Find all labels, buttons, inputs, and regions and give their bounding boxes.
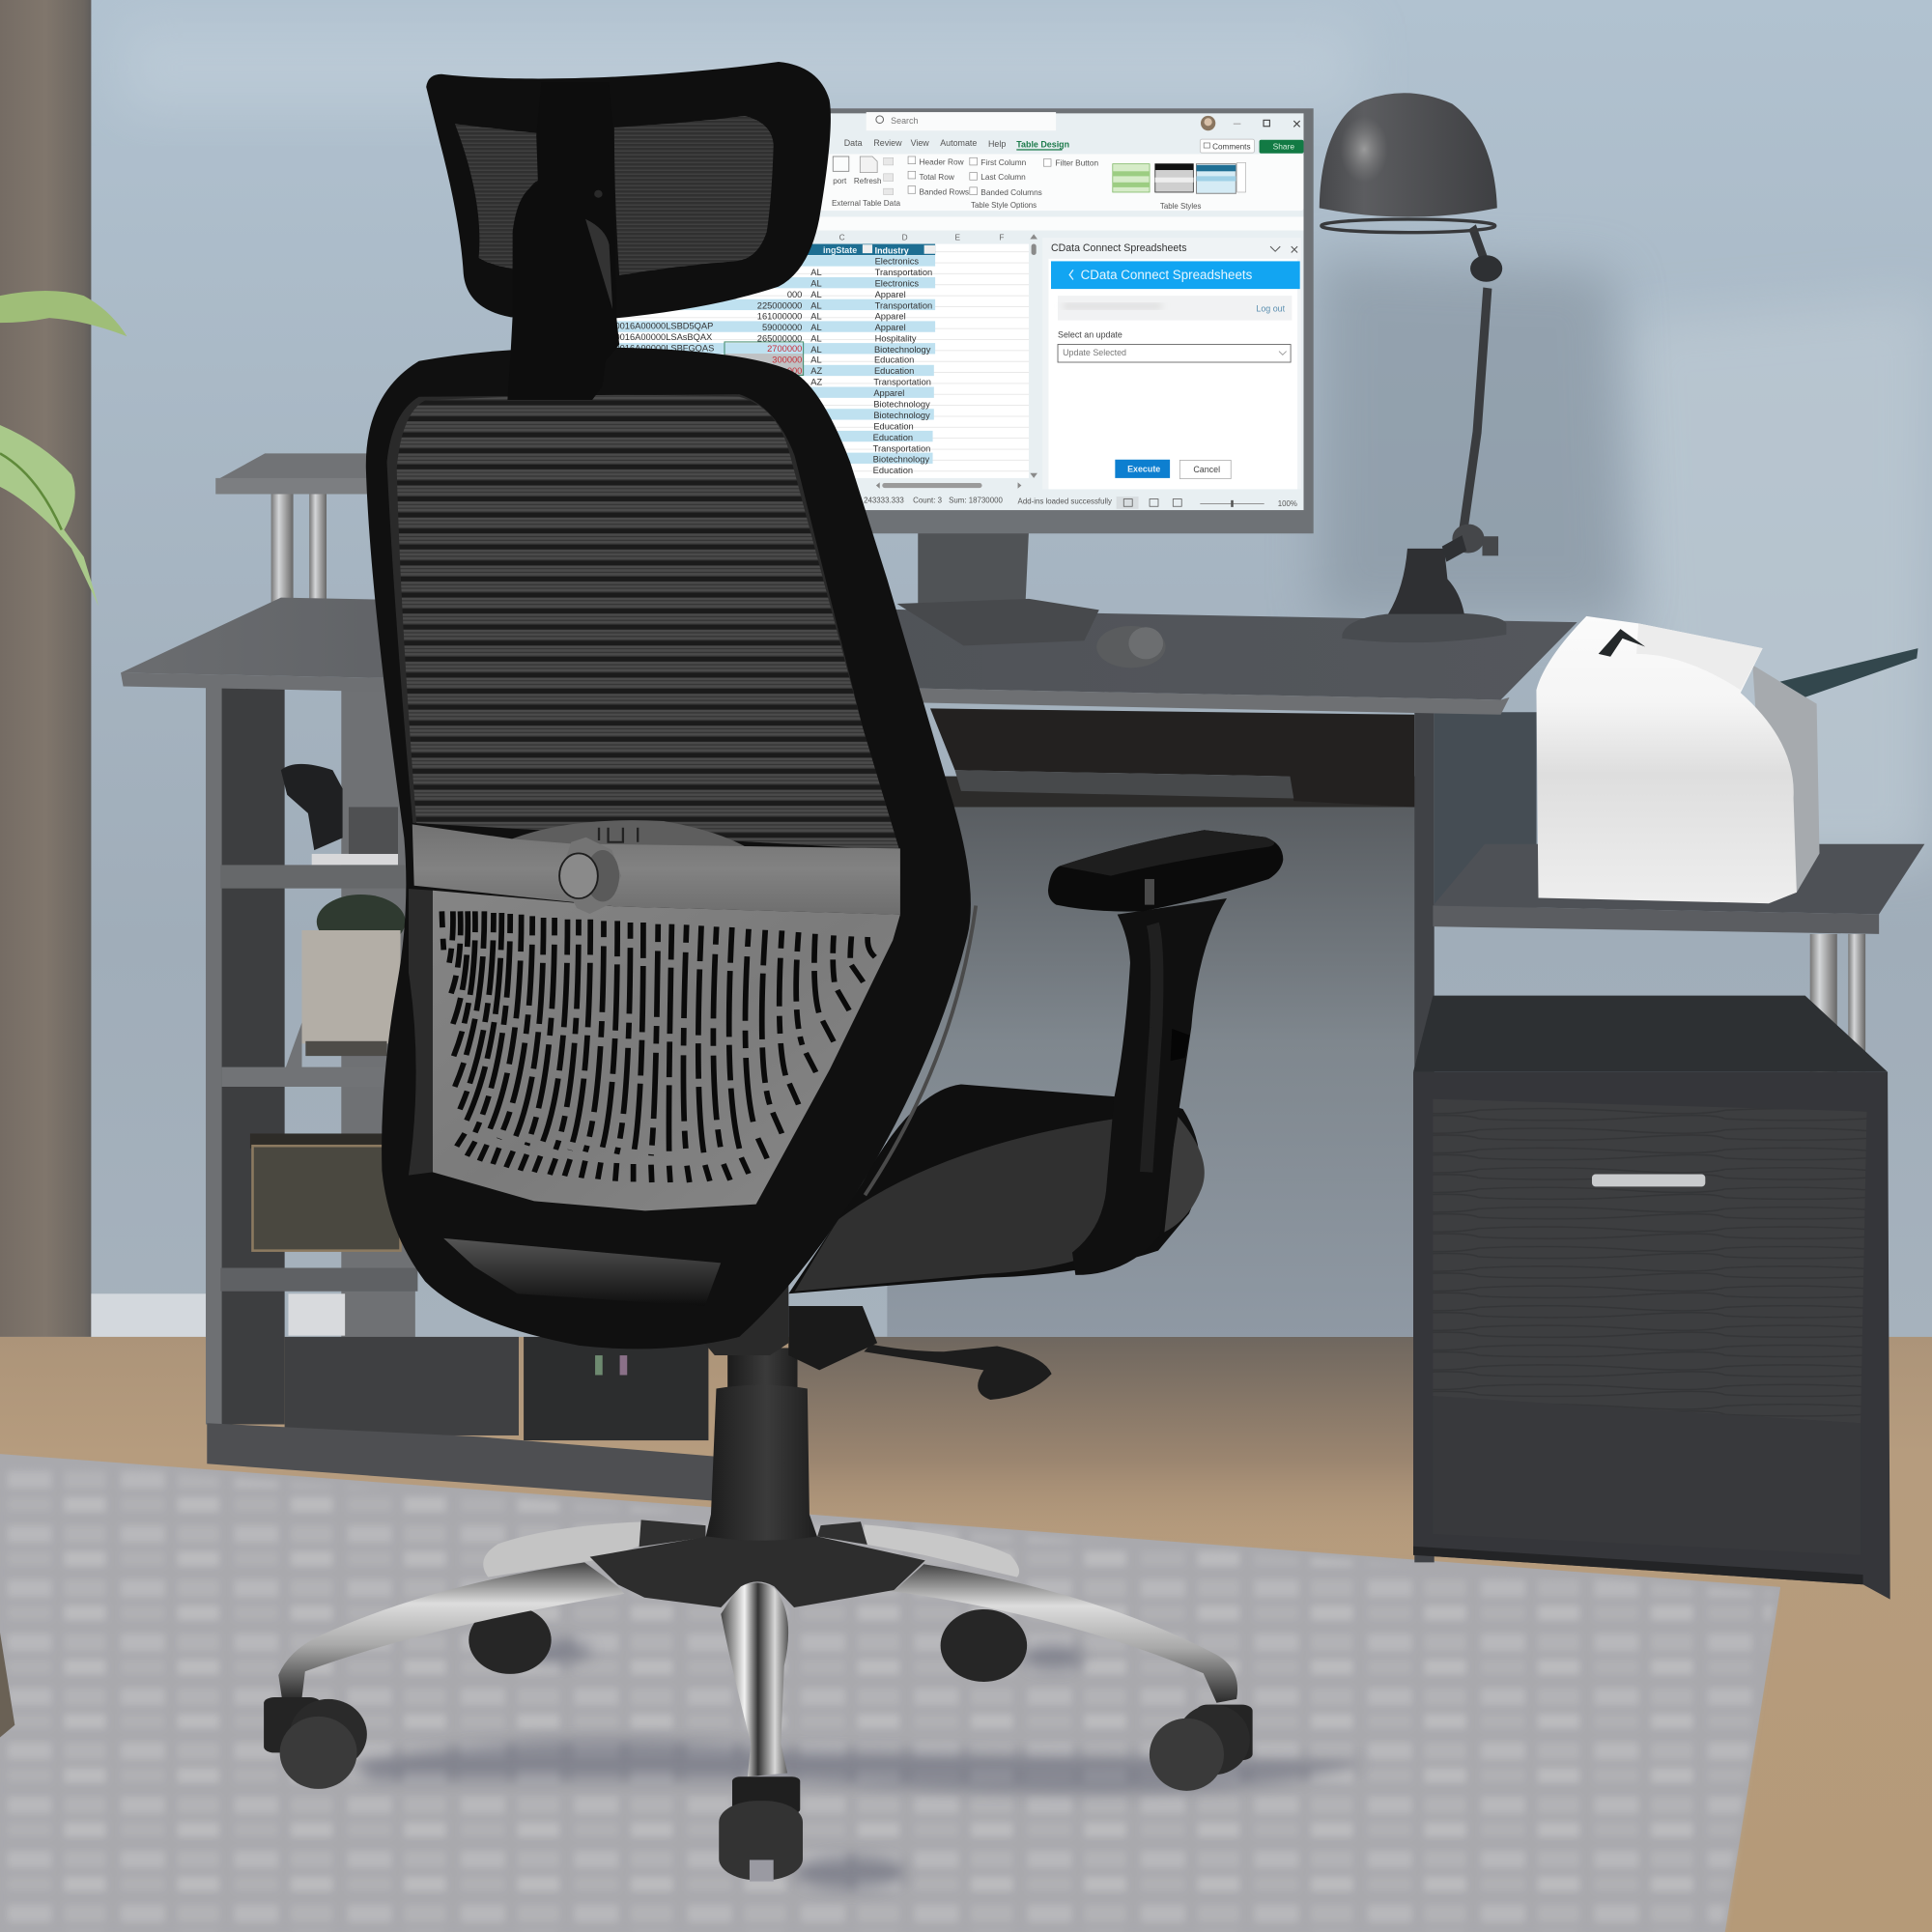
keyboard tray xyxy=(930,708,1414,807)
add-in pane: CData Connect Spreadsheets xyxy=(1051,242,1187,254)
revenue column: 000 xyxy=(787,290,802,299)
cabinet xyxy=(1413,996,1890,1600)
table style options: Table Style Options xyxy=(971,201,1037,210)
printer top shading xyxy=(1636,623,1763,690)
revenue column: 161000000 xyxy=(757,311,802,321)
lumbar knob xyxy=(559,838,621,914)
revenue column xyxy=(757,290,802,376)
horizontal scrollbar xyxy=(876,482,1021,489)
desk: right side xyxy=(887,708,1924,1600)
shelf three xyxy=(220,1267,417,1292)
headrest and neck xyxy=(426,62,831,400)
window controls xyxy=(1234,120,1300,127)
select label: Select an update xyxy=(1058,329,1122,339)
gas lift xyxy=(705,1348,817,1544)
computer tower xyxy=(524,1337,708,1440)
table header: ingState xyxy=(823,245,857,255)
table style options: Banded Columns xyxy=(980,187,1042,197)
phone on shelf xyxy=(281,764,343,850)
column letters: C xyxy=(839,233,845,242)
wall xyxy=(0,0,1932,1343)
table style options: Filter Button xyxy=(1055,158,1099,168)
outer post xyxy=(206,685,222,1424)
industry column: Education xyxy=(873,433,913,442)
back mesh xyxy=(387,394,899,850)
calculator xyxy=(312,854,398,865)
industry column: Apparel xyxy=(875,311,906,321)
column letters xyxy=(839,233,1005,242)
ribbon tabs: Table Design xyxy=(1016,139,1069,149)
seat xyxy=(788,1084,1205,1293)
office chair xyxy=(264,62,1283,1882)
wall under desk xyxy=(887,801,1417,1337)
column letters: D xyxy=(902,233,908,242)
left front spoke xyxy=(278,1562,624,1699)
status bar: Sum: 18730000 xyxy=(949,496,1003,504)
industry column: Biotechnology xyxy=(873,400,930,410)
account ids xyxy=(614,322,714,354)
wood floor xyxy=(0,1337,1932,1932)
table style options: Last Column xyxy=(980,172,1026,182)
state column xyxy=(810,268,822,387)
mouse xyxy=(1096,626,1166,668)
desk: left shelving unit xyxy=(206,685,715,1501)
upper shelf with steel legs xyxy=(215,453,518,616)
cancel button xyxy=(1179,460,1231,479)
lamp base xyxy=(1342,549,1506,642)
monitor xyxy=(579,108,1314,645)
monitor stand xyxy=(897,529,1099,645)
plate slots xyxy=(441,911,875,1182)
formula bar xyxy=(813,216,1303,231)
search box: Search xyxy=(891,116,918,126)
ribbon tabs: Review xyxy=(873,138,902,148)
industry column: Transportation xyxy=(875,301,932,311)
table style options xyxy=(908,156,1099,210)
account row xyxy=(1058,296,1292,321)
left plate shadow xyxy=(409,889,433,1176)
industry column: Apparel xyxy=(875,323,906,332)
pane header xyxy=(1051,261,1300,289)
dark inner panel xyxy=(220,685,285,1424)
lumbar support xyxy=(409,820,900,1210)
industry column: Apparel xyxy=(873,388,904,398)
vertical scrollbar xyxy=(1030,234,1037,478)
bottom left object xyxy=(0,1633,14,1737)
bezel xyxy=(579,108,1314,533)
lamp arm xyxy=(1444,227,1502,555)
status bar: 243333.333 xyxy=(864,496,904,504)
right front spoke xyxy=(884,1564,1237,1703)
state column: AL xyxy=(810,323,822,332)
headrest frame xyxy=(426,62,831,319)
back frame xyxy=(366,348,971,1349)
state column: AL xyxy=(810,279,822,289)
comments button: Comments xyxy=(1212,142,1251,151)
share button xyxy=(1260,140,1303,154)
industry column xyxy=(873,257,932,475)
state column: AL xyxy=(810,355,822,365)
account ids: 0016A00000LSAsBQAX xyxy=(614,332,712,342)
state column: AZ xyxy=(810,378,822,387)
state column: AL xyxy=(810,333,822,343)
ribbon external table data group xyxy=(832,156,900,208)
table style swatches xyxy=(1113,162,1246,211)
ribbon tabs: Automate xyxy=(940,138,977,148)
industry column: Transportation xyxy=(875,268,932,277)
account ids: 0016A00000LSBD5QAP xyxy=(614,322,713,331)
rug xyxy=(0,1454,1780,1932)
industry column: Education xyxy=(873,466,913,475)
under desk back xyxy=(887,777,1430,807)
execute button: Execute xyxy=(1127,465,1160,474)
paper tray xyxy=(1769,648,1918,707)
state column: AZ xyxy=(810,366,822,376)
revenue column: 000 xyxy=(787,366,802,376)
status bar: 100% xyxy=(1278,499,1297,508)
industry column: Biotechnology xyxy=(874,345,931,355)
industry column: Education xyxy=(874,355,914,365)
banded rows xyxy=(579,255,935,464)
revenue column: 265000000 xyxy=(757,333,802,343)
front caster xyxy=(719,1776,803,1882)
shelf two xyxy=(222,1023,412,1087)
chair shadow on rug xyxy=(357,1638,1368,1890)
right leg xyxy=(1414,712,1435,1562)
lumbar plate xyxy=(433,891,900,1210)
state column: AL xyxy=(810,268,822,277)
industry column: Biotechnology xyxy=(873,411,930,420)
revenue column: 2700000 xyxy=(767,344,802,354)
revenue column: 225000000 xyxy=(757,301,802,311)
desk lamp xyxy=(1320,93,1506,642)
ribbon tabs: Data xyxy=(844,138,863,148)
printer mark xyxy=(1599,629,1645,657)
plant leaves xyxy=(0,291,127,607)
state column: AL xyxy=(810,311,822,321)
state column: AL xyxy=(810,345,822,355)
seat mechanism xyxy=(788,1306,877,1370)
hub xyxy=(590,1537,925,1607)
ribbon external table data group: External Table Data xyxy=(832,199,900,208)
screen xyxy=(579,113,1303,510)
lumbar band xyxy=(412,824,900,915)
table style options: Header Row xyxy=(920,156,964,166)
table style options: Total Row xyxy=(920,172,954,182)
search box xyxy=(867,112,1056,130)
column letters: F xyxy=(999,233,1005,242)
table style options: First Column xyxy=(980,157,1027,167)
dropdown: Update Selected xyxy=(1063,348,1126,357)
printer body xyxy=(1536,616,1797,903)
left caster xyxy=(264,1697,367,1789)
industry column: Electronics xyxy=(875,279,919,289)
ribbon tabs: View xyxy=(911,138,929,148)
column letters: E xyxy=(955,233,961,242)
status bar xyxy=(864,496,1297,509)
lumbar clip xyxy=(599,828,638,842)
tilt lever xyxy=(864,1345,1052,1400)
industry column: Biotechnology xyxy=(873,454,929,464)
neck screw xyxy=(594,190,603,198)
chrome shelf legs xyxy=(1810,934,1865,1079)
ribbon external table data group: port xyxy=(833,177,847,185)
add-in pane xyxy=(1042,238,1301,489)
planter xyxy=(301,930,401,1056)
desktop surface xyxy=(121,598,1577,715)
arm column xyxy=(1072,898,1227,1275)
state column: AL xyxy=(810,290,822,299)
industry column: Apparel xyxy=(875,290,906,299)
rear hub arms xyxy=(639,1520,867,1547)
succulent xyxy=(317,895,406,949)
armrest xyxy=(1048,830,1283,1275)
state column: AL xyxy=(810,301,822,311)
shelf one xyxy=(220,865,406,889)
desk base xyxy=(207,1423,715,1501)
spreadsheet grid xyxy=(579,244,1029,478)
industry column: Hospitality xyxy=(875,333,917,343)
account row: Log out xyxy=(1256,304,1286,314)
right caster xyxy=(1150,1705,1253,1791)
front spoke xyxy=(721,1582,788,1776)
right shelf xyxy=(1433,844,1924,934)
cancel button: Cancel xyxy=(1193,465,1220,474)
left head mesh xyxy=(455,124,541,269)
industry column: Education xyxy=(874,366,914,376)
revenue column: 59000000 xyxy=(762,323,802,332)
lower wedge xyxy=(443,1238,721,1306)
box on shelf xyxy=(250,1133,404,1251)
execute button xyxy=(1115,460,1170,478)
ribbon external table data group: Refresh xyxy=(854,177,881,185)
share button: Share xyxy=(1273,141,1294,151)
avatar xyxy=(1201,116,1215,130)
baseboard glimpse xyxy=(288,1293,345,1336)
lamp ring xyxy=(1321,219,1495,233)
pane header: CData Connect Spreadsheets xyxy=(1081,268,1253,282)
table header xyxy=(579,244,935,256)
right head mesh xyxy=(614,116,774,275)
ribbon tabs: Help xyxy=(988,139,1006,149)
lamp shade xyxy=(1320,93,1497,217)
seat-frame stitching xyxy=(865,906,976,1195)
industry column: Transportation xyxy=(873,378,931,387)
selection xyxy=(724,342,804,376)
industry column: Electronics xyxy=(875,257,919,267)
account ids: 0016A00000LSBFGQAS xyxy=(614,344,714,354)
dropdown xyxy=(1058,345,1291,362)
shaded floor under desk xyxy=(788,1337,1417,1547)
comments button xyxy=(1200,139,1254,153)
lumbar dome xyxy=(512,820,751,849)
table style swatches: Table Styles xyxy=(1160,202,1201,211)
rear casters xyxy=(469,1605,1027,1682)
wood column on left xyxy=(0,0,91,1337)
chair base and casters xyxy=(264,1345,1253,1882)
arm pad xyxy=(1048,830,1283,912)
industry column: Transportation xyxy=(873,443,930,453)
table style options: Banded Rows xyxy=(920,187,969,197)
ribbon panel xyxy=(813,154,1303,211)
printer side xyxy=(1752,665,1820,903)
status bar: Count: 3 xyxy=(913,496,943,504)
baseboard xyxy=(91,1293,214,1337)
ribbon tabs xyxy=(844,138,1069,151)
industry column: Education xyxy=(873,422,914,432)
table header: Industry xyxy=(875,246,909,256)
status bar: Add-ins loaded successfully xyxy=(1018,497,1112,506)
printer xyxy=(1536,616,1918,903)
arm button xyxy=(1171,1029,1190,1061)
neck xyxy=(507,82,619,400)
back panel xyxy=(341,685,415,1424)
revenue column: 300000 xyxy=(772,355,802,365)
rear chrome spokes xyxy=(483,1521,1019,1577)
